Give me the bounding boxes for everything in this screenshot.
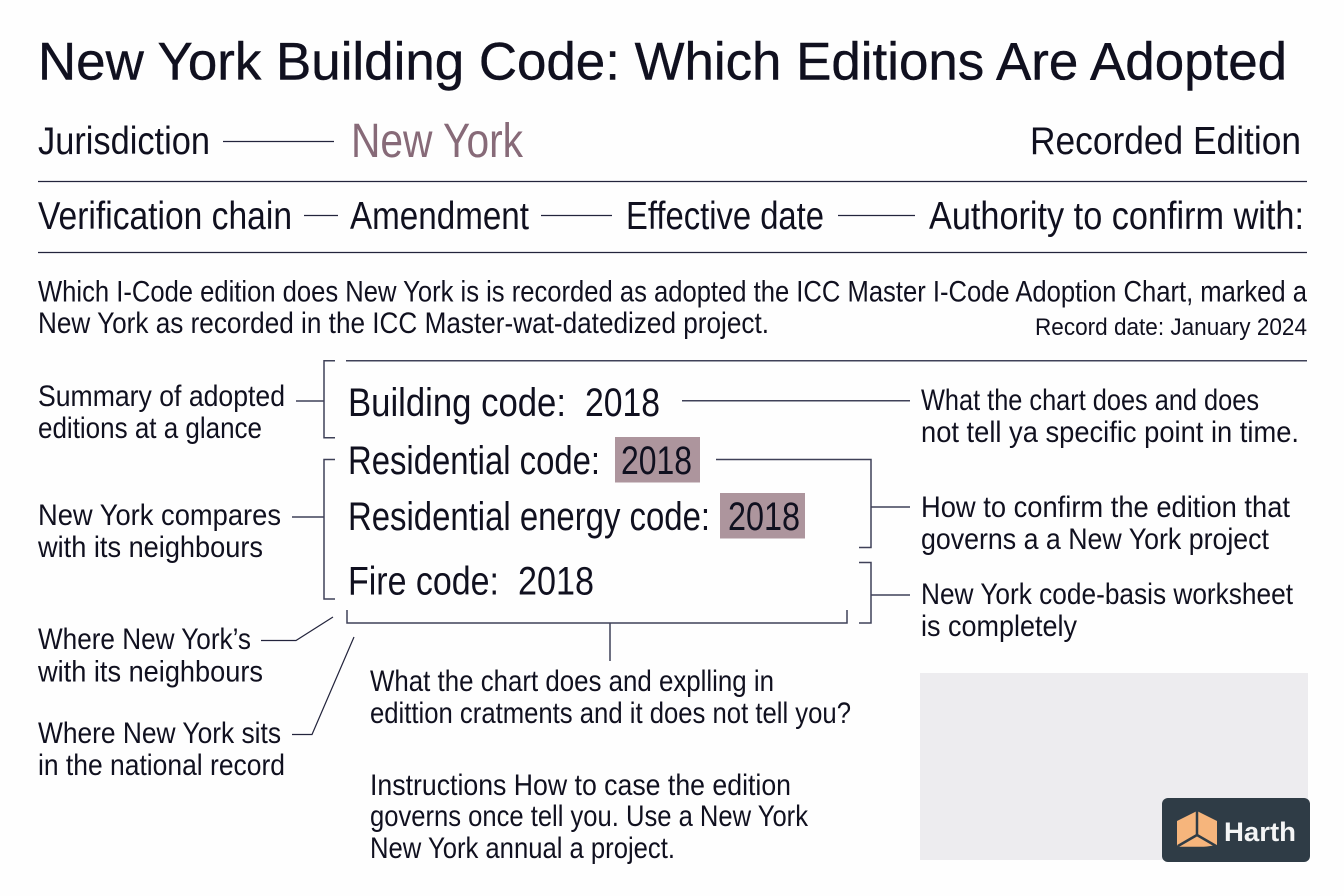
instructions: Instructions How to case the edition <box>370 769 791 802</box>
jurisdiction row: Recorded Edition <box>1030 120 1301 163</box>
instructions: governs once tell you. Use a New York <box>370 800 809 833</box>
right annotation: chart does: not tell ya specific point in time. <box>921 416 1299 449</box>
left annotation: where New York's <box>37 617 333 688</box>
residential energy code row: Residential energy code: <box>348 495 710 539</box>
left annotation: where New York's: with its neighbours <box>37 656 263 688</box>
logo wordmark: Harth <box>1224 817 1296 847</box>
instructions: New York annual a project. <box>370 832 675 865</box>
center note: edittion cratments and it does not tell you? <box>370 697 851 730</box>
intro text block: New York as recorded in the ICC Master-wat-datedized project. <box>38 307 769 340</box>
right annotation: how to confirm <box>921 491 1291 556</box>
image placeholder panel <box>920 673 1308 860</box>
residential energy code row: 2018 <box>728 495 800 539</box>
title: New York Building Code: Which Editions Are Adopted <box>38 32 1287 92</box>
right annotation: how to confirm: How to confirm the edition that <box>921 491 1291 524</box>
jurisdiction row: Jurisdiction <box>38 120 210 163</box>
logo badge <box>1162 798 1310 862</box>
verification chain row: Authority to confirm with: <box>929 195 1304 238</box>
left annotation: national record <box>38 637 354 782</box>
left annotation: where New York's: Where New York’s <box>38 623 251 656</box>
icon: orange cube <box>1177 810 1217 848</box>
record date: Record date: January 2024 <box>1035 314 1307 341</box>
left annotation: national record: Where New York sits <box>38 717 281 750</box>
verification chain row: Verification chain <box>38 195 292 238</box>
jurisdiction row: New York <box>351 115 524 168</box>
fire code row: 2018 <box>518 560 594 604</box>
left annotation: summary: Summary of adopted <box>38 380 285 413</box>
right annotation: chart does: What the chart does and does <box>921 384 1259 417</box>
residential code row: 2018 <box>621 439 692 483</box>
building code row: 2018 <box>585 381 660 425</box>
verification chain row: Amendment <box>350 195 529 238</box>
residential energy highlight <box>720 493 805 538</box>
code list <box>348 381 805 604</box>
left annotation: neighbours: New York compares <box>38 499 281 532</box>
center note: What the chart does and explling in <box>370 665 774 698</box>
left annotation: neighbours <box>37 460 335 599</box>
right connectors <box>347 401 910 661</box>
residential code highlight <box>615 437 700 482</box>
right annotation: worksheet: New York code-basis worksheet <box>921 578 1294 611</box>
right annotation: chart does <box>921 384 1299 449</box>
center note <box>370 665 851 730</box>
right annotation: how to confirm: governs a a New York project <box>921 523 1270 556</box>
left annotation: national record: in the national record <box>38 749 285 782</box>
left annotation: neighbours: with its neighbours <box>37 531 263 564</box>
right annotation: worksheet <box>921 578 1294 643</box>
residential code row: Residential code: <box>348 439 600 483</box>
building code row: Building code: <box>348 381 566 425</box>
verification chain row <box>38 195 1304 238</box>
left annotation: summary: editions at a glance <box>38 412 262 445</box>
fire code row: Fire code: <box>348 560 499 604</box>
jurisdiction row <box>38 115 1301 168</box>
left annotation: summary <box>38 361 335 445</box>
right annotation: worksheet: is completely <box>921 610 1077 643</box>
instructions <box>370 769 809 865</box>
intro text block <box>38 276 1307 340</box>
verification chain row: Effective date <box>626 195 824 238</box>
